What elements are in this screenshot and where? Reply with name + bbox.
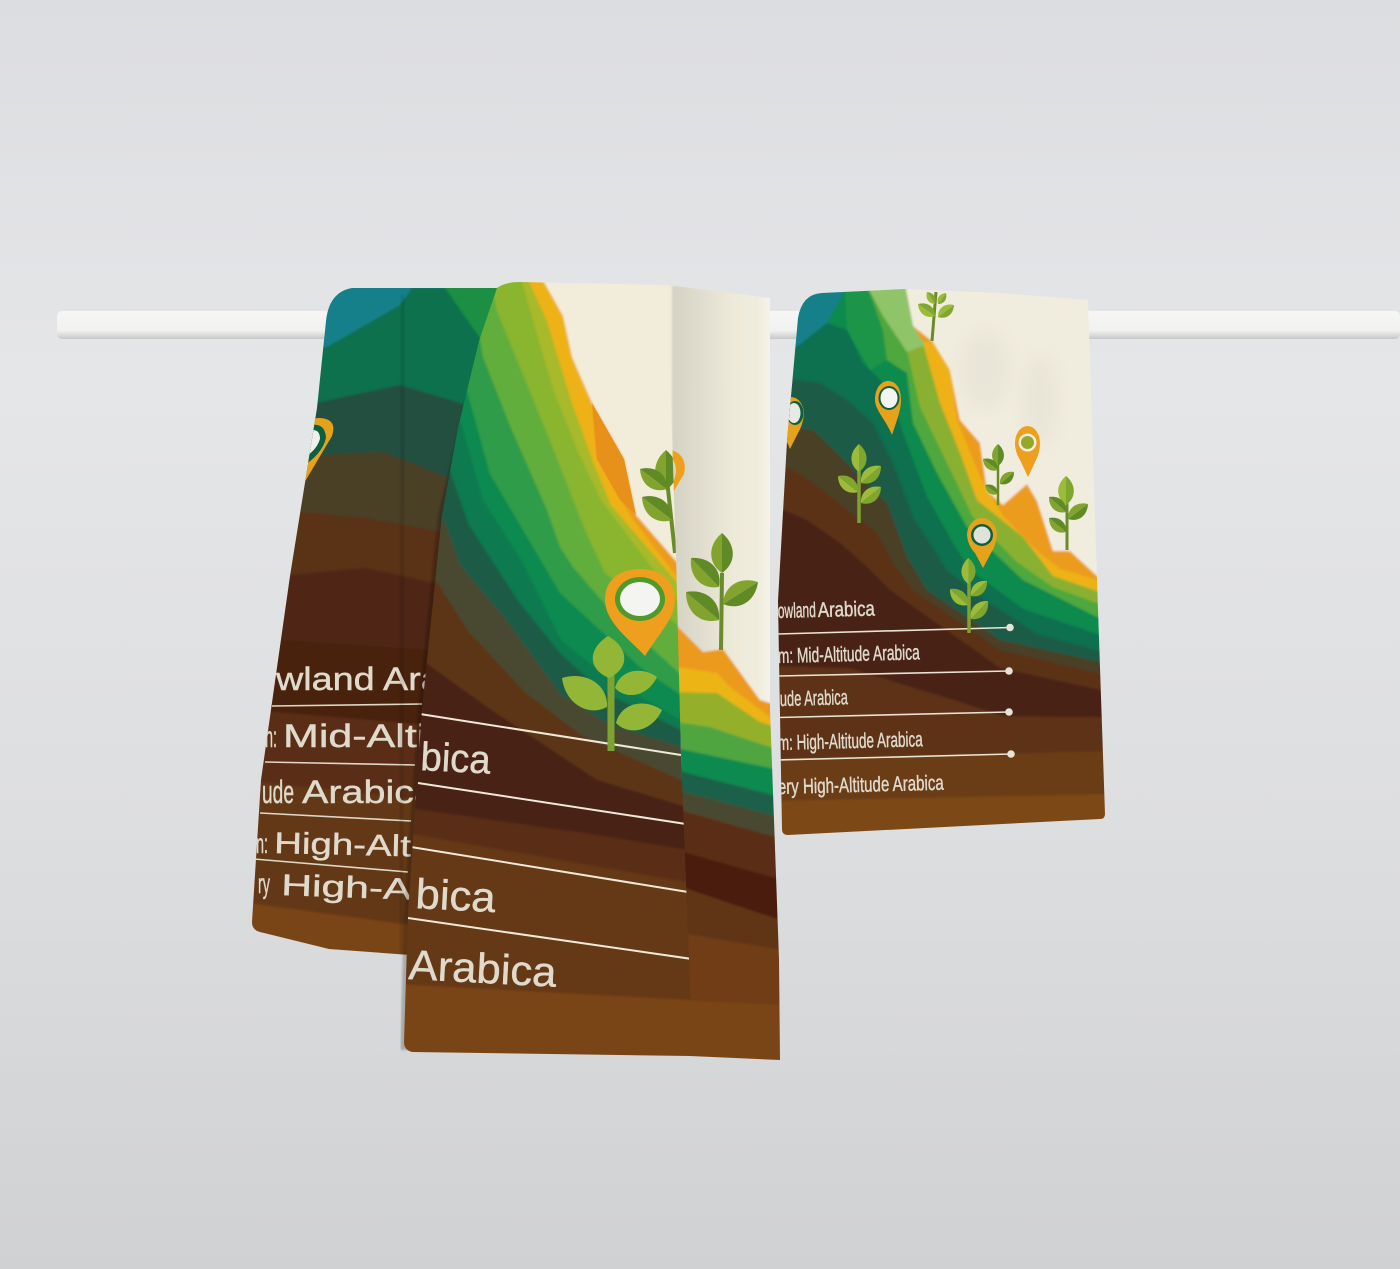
back layer labels: Arabica <box>302 774 436 810</box>
towel: right hanging towel <box>770 285 1115 860</box>
back layer labels: n: <box>256 828 268 859</box>
right towel labels: Arabica <box>818 598 875 622</box>
right towel labels: m: Mid-Altitude Arabica <box>778 641 920 668</box>
right towel map pin: left edge <box>787 397 804 449</box>
back layer labels: ude <box>262 774 294 810</box>
right towel lines with end dots <box>778 624 1015 760</box>
back layer lines <box>254 704 422 872</box>
towel: rear right layer <box>667 285 780 1060</box>
front fold labels <box>408 735 558 996</box>
back layer labels: ry <box>258 868 270 899</box>
front fold map pin <box>605 569 675 656</box>
front fold plant: lower <box>562 636 662 751</box>
right towel labels: owland <box>778 599 816 623</box>
right towel cream mottling <box>960 330 1058 445</box>
front fold labels: Arabica <box>408 941 558 996</box>
towel: front fold <box>395 275 700 1065</box>
front fold labels: bica <box>420 735 492 783</box>
right towel map pin: olive <box>1015 426 1040 477</box>
right towel plant: cream right <box>1049 476 1088 550</box>
front fold lines <box>408 714 692 959</box>
back layer labels: wland Arabica <box>275 661 511 697</box>
back layer labels: High-Altitude <box>281 869 526 911</box>
rear layer plant <box>686 533 758 650</box>
right towel plant: top <box>918 292 954 342</box>
towel: back left layer <box>252 288 497 955</box>
right towel labels: m: High-Altitude Arabica <box>778 728 923 755</box>
right towel plant: bottom <box>950 558 988 633</box>
right towel plant: cream middle <box>983 444 1014 505</box>
towel rail <box>57 311 1400 339</box>
back layer labels: Mid-Altitude <box>283 718 510 754</box>
front fold labels: bica <box>415 870 498 921</box>
right towel map pin: upper <box>875 381 901 435</box>
back layer labels: High-Altitude <box>274 827 495 865</box>
right towel plant: left slope <box>838 444 881 523</box>
right towel labels <box>778 598 944 799</box>
front fold orange patch <box>592 403 636 515</box>
back layer labels <box>256 666 426 904</box>
back layer map pin <box>305 418 334 482</box>
right towel map pin: lower <box>967 518 997 568</box>
rear layer pin arc <box>672 450 685 494</box>
right towel labels: ery High-Altitude Arabica <box>778 772 944 799</box>
right towel labels: ude Arabica <box>780 686 848 711</box>
front fold plant: upper <box>640 450 676 554</box>
back layer labels: n: <box>265 721 277 754</box>
